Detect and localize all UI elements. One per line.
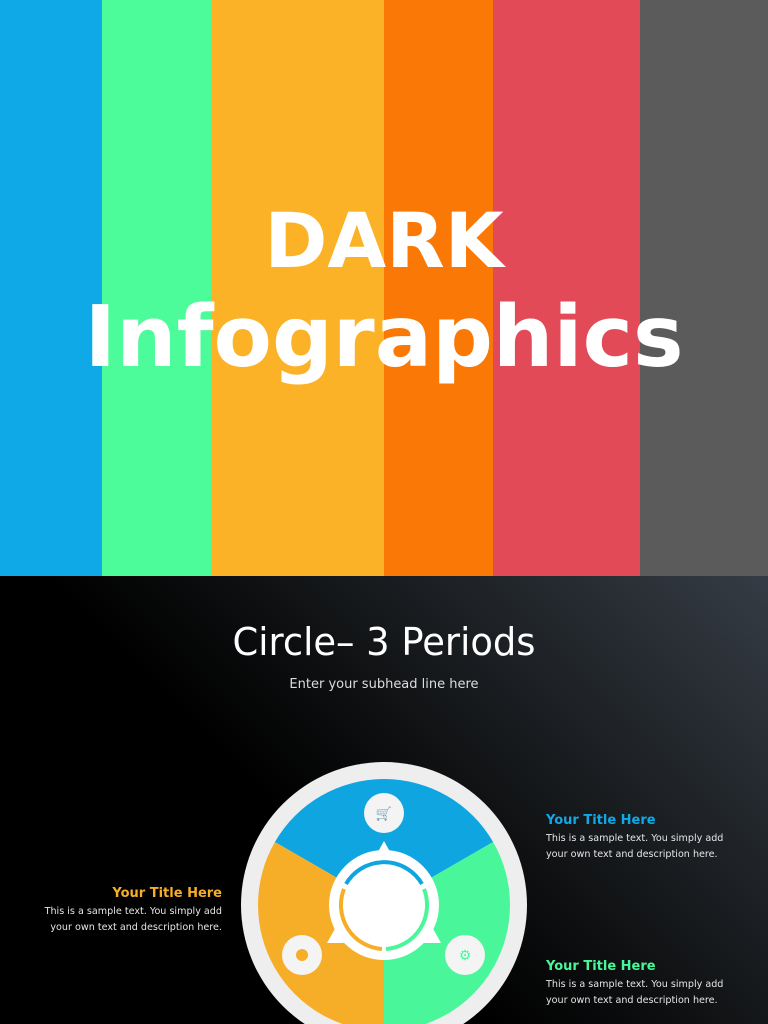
text block: green	[546, 959, 723, 1006]
icon: gear: ⚙	[459, 948, 471, 964]
segment: green	[384, 842, 510, 1024]
text block: orange: Your Title Here	[112, 886, 222, 901]
text block: blue: This is a sample text. You simply add your own text and description here.	[546, 833, 723, 860]
text block: blue	[546, 813, 723, 860]
title: DARK Infographics	[84, 196, 684, 387]
text block: orange	[44, 886, 222, 933]
text block: orange: This is a sample text. You simply add your own text and description here.	[45, 906, 222, 933]
center triangle and circle	[327, 841, 441, 943]
text block: green: This is a sample text. You simply add your own text and description here.	[546, 979, 723, 1006]
icon: cart	[364, 793, 404, 833]
top panel: color stripes	[0, 0, 768, 576]
icon: gear	[445, 935, 485, 975]
subhead: Enter your subhead line here	[289, 677, 479, 692]
bottom panel background	[0, 576, 768, 1024]
text block: green: Your Title Here	[546, 959, 656, 974]
segment: blue	[275, 779, 493, 905]
icon: cart: 🛒	[376, 806, 392, 822]
heading: Circle– 3 Periods	[233, 620, 535, 664]
title: DARK Infographics: DARK	[264, 196, 504, 285]
text block: blue: Your Title Here	[546, 813, 656, 828]
icon: globe	[282, 935, 322, 975]
title: DARK Infographics: Infographics	[84, 288, 684, 387]
segment: orange	[258, 842, 384, 1024]
